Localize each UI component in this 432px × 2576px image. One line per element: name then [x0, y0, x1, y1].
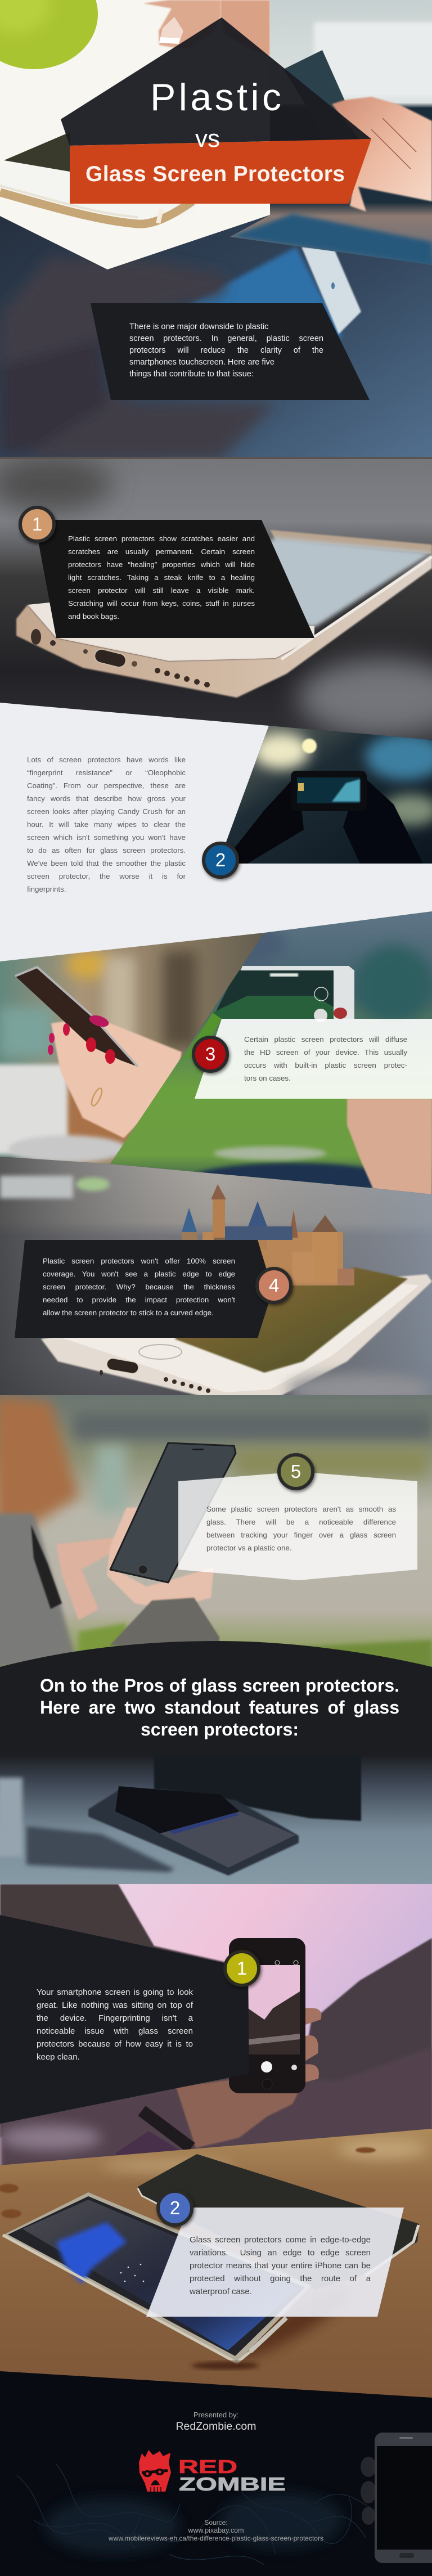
presented by — [176, 2411, 256, 2433]
dark pentagon behind title — [61, 17, 371, 146]
point 3 text: occurs with built-in plastic screen protec- — [244, 1061, 407, 1069]
title banner — [61, 17, 371, 204]
point 2 text: screen which isn't something you won't have — [27, 833, 186, 842]
point 3 text: the HD screen of your device. This usually — [244, 1048, 407, 1057]
point 1 text: Plastic screen protectors show scratches easier and — [68, 534, 255, 543]
point 3 text: tors on cases. — [244, 1074, 291, 1082]
point 2 text: screen looks after playing Candy Crush for an — [27, 807, 186, 816]
glass badge 2 — [156, 2190, 194, 2227]
title word: vs: vs — [195, 125, 220, 152]
glass pro 2 text: protector means that your entire iPhone can be — [190, 2261, 371, 2271]
glass pro 1 text: protectors because of how easy it is to — [37, 2039, 193, 2049]
site name: RedZombie.com — [176, 2420, 256, 2433]
point 5 text: glass. There will be a noticeable difference — [206, 1518, 396, 1526]
glass pro 2 text: variations. Using an edge to edge screen — [190, 2248, 371, 2258]
badge 5: 5 — [291, 1461, 301, 1482]
point 4 text: screen protector. Why? because the thickness — [43, 1283, 235, 1291]
badge 3: 3 — [205, 1044, 215, 1064]
point 2 text: We've been told that the smoother the plastic — [27, 859, 186, 867]
hero background: hand holding blue phone — [0, 203, 432, 461]
point 2 text: to do as often for glass screen protectors. — [27, 846, 186, 855]
point 1 text: light scratches. Taking a steak knife to a healing — [68, 573, 255, 582]
section 6 photo: glass phone on reflective table — [0, 1755, 432, 1884]
point 5 text — [206, 1505, 396, 1552]
logo word RED: RED — [178, 2456, 237, 2477]
section 5 photo: woman using black smartphone — [0, 1395, 432, 1671]
panel: point 5 smoothness — [178, 1453, 417, 1580]
glass pro 2 text: waterproof case. — [190, 2287, 252, 2296]
badge 2: 2 — [215, 849, 226, 870]
badge 3 — [192, 1036, 229, 1073]
glass badge 1: 1 — [237, 1958, 247, 1979]
section 4 photo: castle rising from a phone — [0, 1157, 432, 1395]
glass pro 1 text — [37, 1988, 194, 2062]
glass pro 1 text: keep clean. — [37, 2052, 80, 2062]
point 4 text: coverage. You won't see a plastic edge to edge — [43, 1270, 235, 1278]
panel: intro — [91, 303, 370, 400]
point 3 text: Certain plastic screen protectors will diffuse — [244, 1035, 407, 1044]
badge 4 — [255, 1267, 292, 1304]
intro text: smartphones touchscreen. Here are five — [129, 358, 274, 367]
heading text: On to the Pros of glass screen protectors. — [40, 1675, 399, 1696]
glass pro 1 text: noticeable issue with glass screen — [37, 2026, 193, 2036]
panel: point 2 fingerprints — [27, 756, 242, 893]
section heading: pros of glass — [0, 1641, 432, 1755]
section 3 left photo: hand holding phone in a cafe — [0, 928, 270, 1170]
intro text: things that contribute to that issue: — [129, 370, 254, 379]
badge 5 — [277, 1453, 314, 1490]
orange banner — [70, 139, 371, 204]
section 8 photo: two phones on a wooden table — [0, 2127, 432, 2402]
point 4 text: needed to provide the impact protection won't — [43, 1296, 235, 1304]
title word: Plastic: Plastic — [150, 76, 281, 119]
glass pro 2 text: protected without going the route of a — [190, 2274, 371, 2283]
panel: glass pro 2 edge to edge — [146, 2193, 404, 2317]
zombie head icon — [139, 2450, 171, 2492]
panel: point 3 diffusion — [191, 1019, 432, 1099]
glass badge 2: 2 — [170, 2197, 180, 2218]
source credits: www.mobilereviews-eh.ca/the-difference-plastic-glass-screen-protectors — [109, 2534, 323, 2542]
glass pro 1 text: the device. Fingerprinting isn't a — [37, 2013, 193, 2023]
glass pro 2 text: Glass screen protectors come in edge-to-edge — [190, 2235, 371, 2245]
intro text — [129, 322, 323, 379]
heading text: screen protectors: — [141, 1719, 299, 1739]
glass badge 1 — [223, 1950, 260, 1987]
point 1 text: Scratching will occur from keys, coins, stuff in purses — [68, 599, 255, 608]
glass pro 1 text: great. Like nothing was sitting on top of — [37, 2000, 193, 2010]
point 2 text: Lots of screen protectors have words like — [27, 756, 186, 764]
badge 1 — [19, 506, 56, 543]
badge 4: 4 — [269, 1275, 279, 1296]
presented by: Presented by: — [194, 2411, 238, 2419]
source credits — [0, 2519, 432, 2543]
point 2 text — [27, 756, 186, 893]
point 2 text: fancy words that describe how gross your — [27, 794, 186, 803]
point 2 text: “fingerprint resistance” or “Oleophobic — [27, 768, 186, 777]
section 1 photo: rose gold phone on dark table — [0, 456, 432, 740]
point 2 text: hour. It will take many wipes to clear the — [27, 820, 186, 829]
panel: point 1 scratches — [18, 506, 314, 638]
intro text: screen protectors. In general, plastic screen — [129, 334, 323, 343]
title line: Glass Screen Protectors: Glass Screen Protectors — [86, 162, 345, 186]
point 4 text: Plastic screen protectors won't offer 100% screen — [43, 1257, 235, 1265]
panel: point 4 coverage — [15, 1240, 296, 1338]
point 1 text — [68, 534, 255, 621]
heading text — [40, 1675, 399, 1739]
top-right photo: hand holding phone over keyboard — [225, 0, 432, 270]
logo: Red Zombie — [139, 2450, 286, 2492]
point 3 text — [244, 1035, 407, 1082]
point 2 text: fingerprints. — [27, 885, 66, 893]
point 5 text: Some plastic screen protectors aren't as smooth as — [206, 1505, 396, 1513]
source credits: www.pixabay.com — [188, 2526, 244, 2534]
light panel behind section 2 — [0, 703, 432, 963]
intro text: There is one major downside to plastic — [129, 322, 268, 331]
point 5 text: protector vs a plastic one. — [206, 1544, 292, 1552]
source credits: Source: — [204, 2519, 228, 2526]
intro text: protectors will reduce the clarity of the — [129, 346, 323, 355]
point 2 text: Coating”. From our perspective, these are — [27, 781, 186, 790]
point 5 text: between tracking your finger over a glass screen — [206, 1531, 396, 1539]
top-left photo: apple, fingertip and gold phone — [0, 0, 270, 270]
point 1 text: scratches are usually permanent. Certain screen — [68, 547, 255, 556]
point 1 text: protectors have “healing” properties which will hide — [68, 560, 255, 569]
point 4 text — [43, 1257, 235, 1317]
section 3 right photo: phone filming a stadium — [107, 911, 432, 1198]
point 4 text: allow the screen protector to stick to a curved edge. — [43, 1309, 214, 1317]
badge 1: 1 — [32, 514, 42, 534]
section 2 photo: hands filming a concert — [214, 723, 432, 866]
point 2 text: screen protector, the worse it is for — [27, 872, 186, 880]
section 7 photo: phone held up against a pink sky — [0, 1884, 432, 2172]
footer background with smoke and dark phone — [0, 2363, 432, 2576]
point 1 text: and book bags. — [68, 612, 119, 621]
badge 2 — [202, 842, 239, 879]
panel: glass pro 1 clarity — [0, 1915, 264, 2124]
glass pro 1 text: Your smartphone screen is going to look — [37, 1988, 193, 1997]
glass pro 2 text — [190, 2235, 371, 2296]
point 1 text: screen protector will still leave a visible mark. — [68, 586, 255, 595]
heading text: Here are two standout features of glass — [40, 1697, 399, 1718]
